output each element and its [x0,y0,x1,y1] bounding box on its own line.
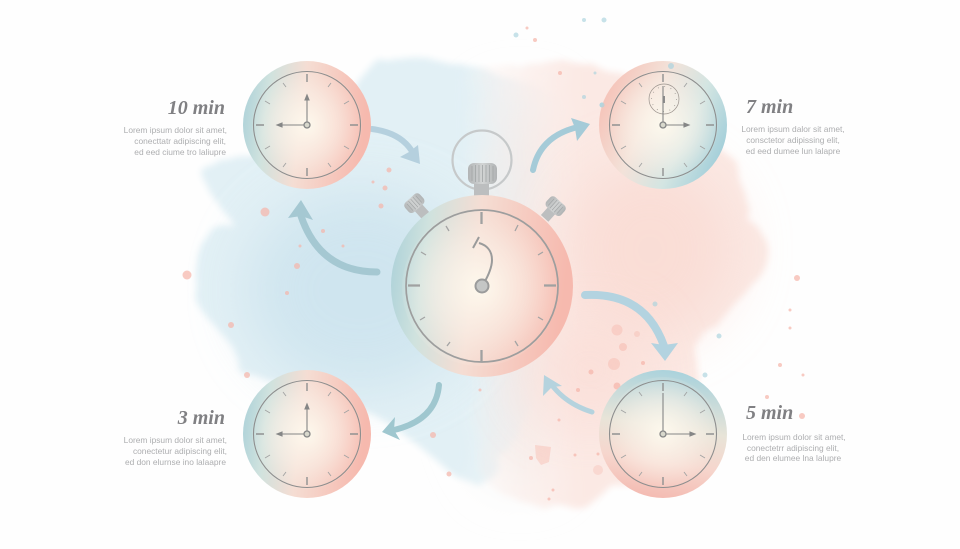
label: 3 min [124,407,227,467]
label: 5 min: Lorem ipsum dolor sit amet, [742,432,846,442]
label: 3 min: 3 min [177,407,225,429]
dial ring [406,210,558,362]
dial wash [402,210,558,366]
watercolor wash: pink [454,63,768,507]
label: 5 min: conectetrr adipiscing elit, [747,443,839,453]
watercolor wash: lower pink [525,315,655,425]
blue paint dots on rim [600,63,674,108]
label: 3 min: ed don elurnse ino lalaapre [125,457,226,467]
hands [277,95,309,127]
label: 7 min: ed eed dumee lun lalapre [746,146,841,156]
clock: 10 min [243,61,371,189]
label: 5 min: 5 min [746,402,793,424]
arrow: 10 min clock to stopwatch [372,129,420,164]
arrow: stopwatch to 5 min clock [585,295,678,361]
hub [476,280,488,292]
hands [663,393,695,436]
sub-dial [649,84,679,114]
stem and crown [468,163,497,197]
clock: 5 min [599,370,727,498]
label: 7 min [741,96,845,156]
watercolor wash: deep pink right [565,160,735,340]
label: 5 min [742,402,846,463]
ring [452,130,512,190]
watercolor wash: pale neutral blend [465,100,575,480]
case [391,195,573,377]
arrow: stopwatch to 10 min clock [288,200,377,272]
central stopwatch [391,130,573,377]
label: 10 min: Lorem ipsum dolor sit amet, [124,125,227,135]
watercolor wash: blue [193,56,590,484]
label: 7 min: Lorem ipsum dalor sit amet, [741,124,845,134]
hands [277,404,309,436]
label: 7 min: consctetor adipissing elit, [746,135,840,145]
arrow: stopwatch to 7 min clock [533,118,590,170]
arrow: stopwatch to 3 min clock [382,385,439,440]
hand [473,237,492,283]
label: 10 min [124,97,227,157]
blue speckles [514,18,722,378]
label: 7 min: 7 min [746,96,793,118]
label: 10 min: 10 min [168,97,225,119]
label: 5 min: ed den elumee lna lalupre [745,453,842,463]
paint speckles [182,26,805,500]
minor ticks [420,225,543,346]
watercolor wash: deep blue centre [245,190,475,390]
arrow: 5 min clock to stopwatch [543,375,592,412]
hands [663,86,689,127]
clock: 3 min [243,370,371,498]
label: 3 min: conectetur adipiscing elit, [133,446,227,456]
right pusher [537,195,567,225]
label: 10 min: ed eed ciume tro laliupre [134,147,226,157]
clock: 7 min [599,61,727,189]
label: 10 min: conecttatr adipiscing elit, [134,136,226,146]
left pusher [403,192,433,222]
hour ticks [408,212,556,362]
label: 3 min: Lorem ipsum dolor sit amet, [124,435,227,445]
